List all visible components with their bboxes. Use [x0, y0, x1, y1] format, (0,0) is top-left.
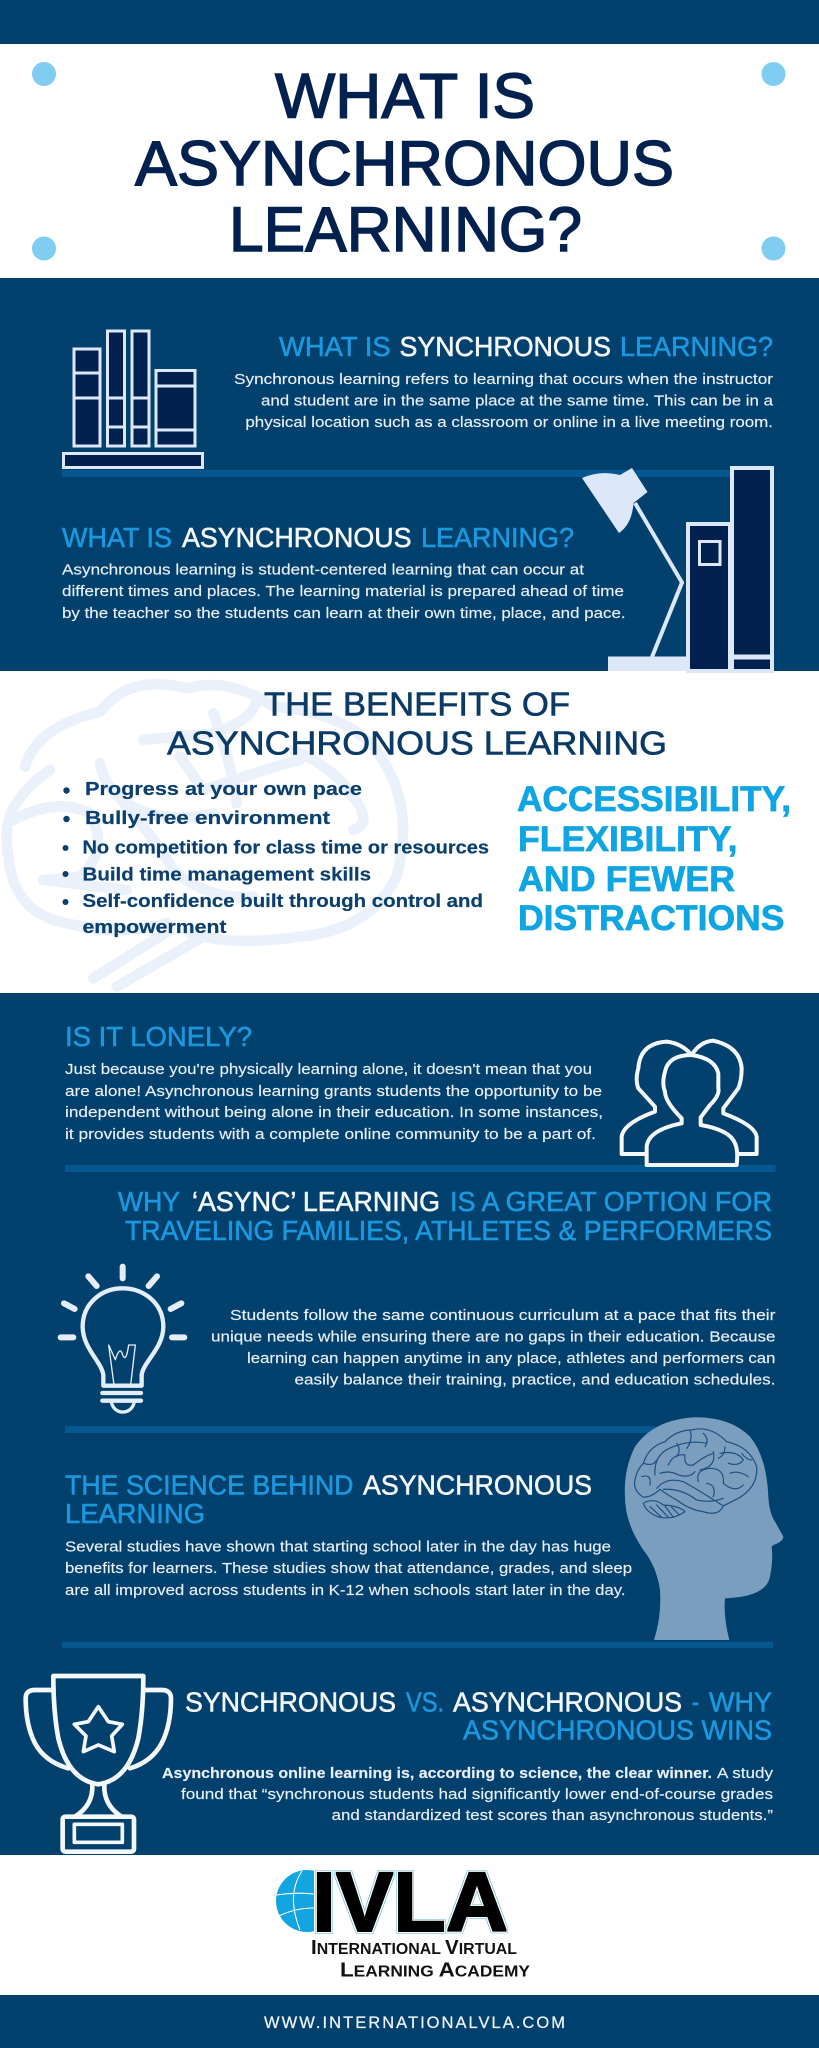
logo name: INTERNATIONAL VIRTUAL: [311, 1937, 517, 1959]
callout: accessibility, flexibility: [517, 780, 791, 938]
heading: what is asynchronous learning: [62, 522, 574, 553]
heading: synchronous vs asynchronous: ASYNCHRONOUS: [453, 1686, 682, 1718]
text: is it lonely: [65, 1061, 603, 1143]
list: benefits: Build time management skills: [82, 864, 371, 884]
divider: [62, 470, 773, 477]
icon: brain watermark: [7, 684, 403, 987]
heading: what is asynchronous learning: ASYNCHRONOUS: [182, 522, 412, 553]
heading: synchronous vs asynchronous: [185, 1686, 772, 1746]
heading: synchronous vs asynchronous: WHY: [709, 1686, 772, 1718]
text: asynchronous definition: [62, 562, 626, 622]
text: synchronous definition: [234, 371, 774, 431]
list: benefits: Progress at your own pace: [85, 778, 362, 799]
text: science behind: are all improved across students in K-12 when schools start later in the day.: [65, 1582, 626, 1599]
icon: books on shelf: [64, 331, 202, 468]
footer band: [0, 1995, 819, 2048]
icon: two people: [622, 1041, 757, 1165]
text: is it lonely: Just because you're physically learning alone, it doesn't mean that you: [65, 1061, 592, 1078]
top band: [0, 0, 819, 44]
heading: why async learning: TRAVELING FAMILIES, ATHLETES & PERFORMERS: [125, 1215, 772, 1246]
heading: benefits: ASYNCHRONOUS LEARNING: [167, 724, 667, 762]
callout: accessibility, flexibility: ACCESSIBILITY,: [517, 780, 791, 819]
text: asynchronous definition: Asynchronous learning is student-centered learning that can occur at: [62, 562, 585, 578]
callout: accessibility, flexibility: AND FEWER: [518, 860, 735, 899]
list: benefits: empowerment: [82, 916, 226, 937]
text: synchronous definition: and student are in the same place at the same time. This can be in a: [261, 392, 774, 410]
text: clear winner: found that “synchronous students had significantly lower end-of-course grades: [181, 1786, 773, 1803]
title: ASYNCHRONOUS: [135, 129, 674, 199]
heading: benefits: THE BENEFITS OF: [264, 686, 570, 722]
footer url: WWW.INTERNATIONALVLA.COM: [264, 2014, 565, 2032]
heading: science behind: ASYNCHRONOUS: [363, 1470, 592, 1500]
logo name: LEARNING ACADEMY: [340, 1960, 531, 1982]
heading: science behind: [65, 1470, 592, 1529]
logo name: [311, 1937, 531, 1982]
heading: why async learning: IS A GREAT OPTION FOR: [450, 1186, 772, 1217]
heading: what is asynchronous learning: WHAT IS: [62, 522, 172, 553]
heading: synchronous vs asynchronous: SYNCHRONOUS: [185, 1686, 396, 1718]
icon: head with brain: [625, 1417, 783, 1640]
heading: what is synchronous learning: WHAT IS: [279, 331, 391, 362]
list: benefits: Self-confidence built through control and: [82, 890, 483, 911]
heading: why async learning: ‘ASYNC’ LEARNING: [192, 1186, 440, 1217]
heading: benefits: [167, 686, 667, 762]
icon: trophy: [26, 1676, 171, 1852]
icon: light bulb: [61, 1267, 184, 1412]
text: is it lonely: independent without being alone in their education. In some instances,: [65, 1104, 603, 1121]
corner dots: [32, 62, 786, 260]
text: science behind: benefits for learners. These studies show that attendance, grades, and sleep: [65, 1560, 632, 1577]
text: traveling families: Students follow the same continuous curriculum at a pace that fits their: [230, 1307, 776, 1324]
text: clear winner: Asynchronous online learning is, according to science, the clear winner.: [162, 1765, 712, 1782]
panel: main dark section: [0, 993, 819, 1855]
heading: what is synchronous learning: [279, 331, 773, 362]
text: science behind: Several studies have shown that starting school later in the day has huge: [65, 1538, 611, 1556]
text: synchronous definition: physical location such as a classroom or online in a live meeting room.: [245, 414, 773, 431]
heading: why async learning: [118, 1186, 772, 1246]
heading: what is asynchronous learning: LEARNING?: [421, 522, 574, 553]
title: WHAT IS: [275, 62, 535, 132]
title: [135, 62, 674, 265]
list: benefits: Bully-free environment: [85, 807, 330, 828]
icon: lamp and books: [582, 468, 772, 671]
panel: definitions: [0, 278, 819, 671]
title panel: [32, 62, 786, 265]
dividers: [62, 1165, 776, 1648]
heading: is it lonely: IS IT LONELY?: [65, 1021, 252, 1052]
text: traveling families: [211, 1307, 776, 1388]
callout: accessibility, flexibility: FLEXIBILITY,: [518, 820, 738, 859]
text: clear winner: A study: [717, 1765, 774, 1782]
icon: globe: [276, 1870, 314, 1932]
text: traveling families: learning can happen anytime in any place, athletes and performers can: [247, 1350, 776, 1367]
text: asynchronous definition: by the teacher so the students can learn at their own time, place, and pace.: [62, 605, 626, 622]
heading: synchronous vs asynchronous: -: [692, 1686, 699, 1718]
text: traveling families: easily balance their training, practice, and education schedules.: [294, 1372, 776, 1388]
heading: synchronous vs asynchronous: ASYNCHRONOUS WINS: [463, 1714, 772, 1746]
logo wordmark: IVLA: [312, 1855, 508, 1949]
list: benefits: No competition for class time or resources: [82, 836, 489, 858]
text: traveling families: unique needs while ensuring there are no gaps in their education. Because: [211, 1328, 776, 1346]
heading: science behind: THE SCIENCE BEHIND: [65, 1470, 354, 1500]
list: benefits: [62, 778, 489, 937]
text: is it lonely: are alone! Asynchronous learning grants students the opportunity to be: [65, 1083, 602, 1100]
title: LEARNING?: [229, 195, 582, 265]
heading: what is synchronous learning: LEARNING?: [620, 331, 773, 362]
heading: synchronous vs asynchronous: VS.: [406, 1686, 444, 1718]
logo: IVLA: [276, 1870, 530, 1976]
text: clear winner: [162, 1765, 774, 1824]
text: is it lonely: it provides students with a complete online community to be a part of.: [65, 1126, 596, 1143]
text: asynchronous definition: different times and places. The learning material is prepared ahead of time: [62, 583, 624, 600]
text: science behind: [65, 1538, 632, 1599]
panel: benefits: [7, 684, 791, 987]
callout: accessibility, flexibility: DISTRACTIONS: [518, 899, 784, 938]
heading: why async learning: WHY: [118, 1186, 180, 1217]
heading: what is synchronous learning: SYNCHRONOUS: [400, 331, 611, 362]
text: clear winner: and standardized test scores than asynchronous students.”: [332, 1807, 773, 1824]
text: synchronous definition: Synchronous learning refers to learning that occurs when the instructor: [234, 371, 773, 388]
heading: science behind: LEARNING: [65, 1498, 205, 1529]
